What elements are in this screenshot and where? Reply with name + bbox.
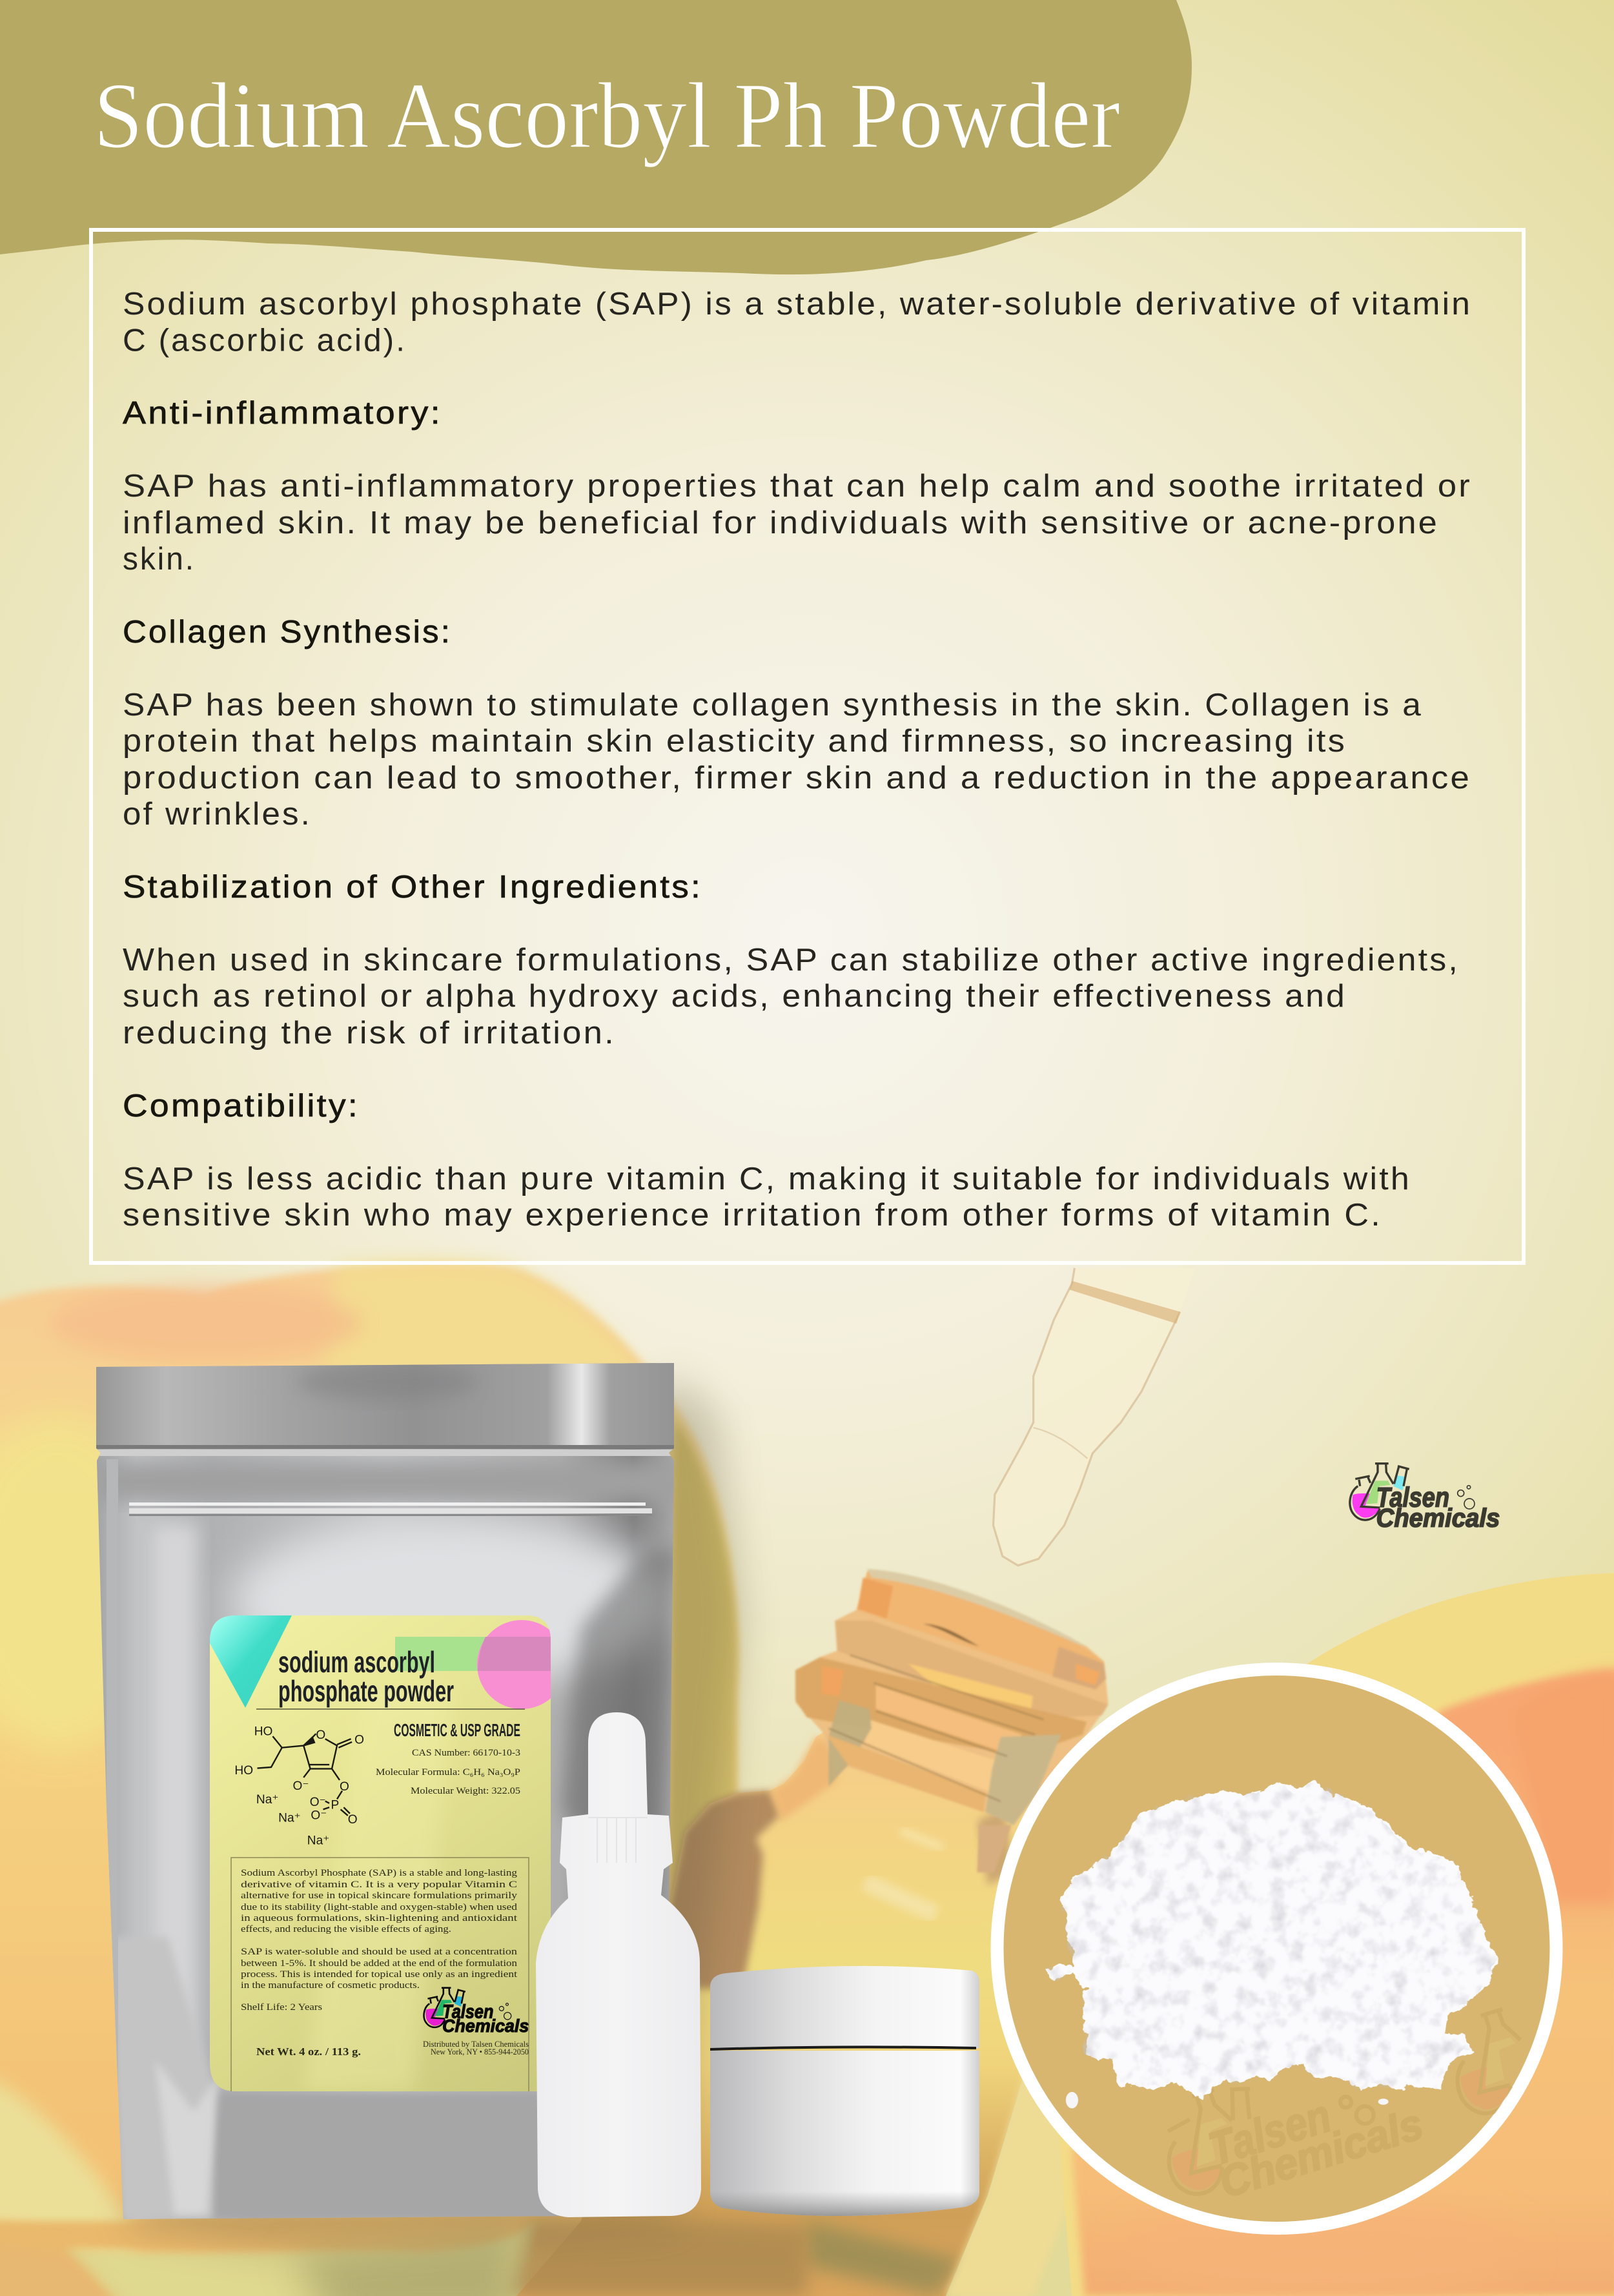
molecule diagram: HO	[234, 1764, 253, 1778]
left citrus fruit	[0, 1260, 737, 2296]
teal triangle	[210, 1615, 292, 1708]
icon: Talsen Chemicals logo: Talsen	[1376, 1482, 1449, 1513]
molecule diagram: P	[331, 1799, 339, 1812]
text block: stabilization: reducing the risk of irritation.	[123, 1016, 616, 1051]
pouch shadow	[123, 1375, 742, 2247]
label description box: in aqueous formulations, skin-lightening and antioxidant	[241, 1913, 518, 1923]
header blob	[0, 0, 1192, 274]
molecule diagram: O⁻	[311, 1809, 327, 1822]
label description box: between 1-5%. It should be added at the end of the formulation	[241, 1958, 518, 1969]
chemical data: Molecular Weight: 322.05	[411, 1786, 520, 1796]
label description box: derivative of vitamin C. It is a very popular Vitamin C	[241, 1880, 517, 1890]
molecule diagram	[234, 1725, 364, 1848]
intro text	[123, 287, 1472, 358]
white powder pile	[1047, 1783, 1499, 2108]
icon: label logo: Talsen	[442, 2001, 493, 2022]
chemical data	[376, 1748, 520, 1796]
text block: anti-inflammatory: inflamed skin. It may be beneficial for individuals with sensitive or acne-prone	[123, 506, 1439, 540]
label title line 2: phosphate powder	[278, 1674, 454, 1708]
white dropper bottle	[536, 1712, 701, 2217]
label description box: effects, and reducing the visible effects of aging.	[241, 1924, 451, 1934]
pink circle	[477, 1620, 551, 1709]
label title: sodium ascorbyl	[278, 1645, 435, 1679]
title: Sodium Ascorbyl Ph Powder	[94, 63, 1120, 168]
text block: anti-inflammatory: SAP has anti-inflammatory properties that can help calm and soothe irritated or	[123, 469, 1472, 504]
text block: collagen synthesis: protein that helps maintain skin elasticity and firmness, so increasing its	[123, 724, 1347, 759]
label description box: process. This is intended for topical use only as an ingredient	[241, 1969, 518, 1980]
text block: collagen synthesis: of wrinkles.	[123, 797, 312, 832]
text block: anti-inflammatory	[123, 469, 1472, 577]
molecule diagram: O	[348, 1813, 358, 1827]
icon: Talsen Chemicals logo	[1350, 1464, 1500, 1532]
white cosmetic jar	[710, 1966, 979, 2216]
icon: Talsen Chemicals logo: Chemicals	[1376, 1504, 1500, 1532]
distributor line 1: Distributed by Talsen Chemicals	[423, 2040, 529, 2049]
molecule diagram: O⁻	[310, 1796, 326, 1809]
label description box: Sodium Ascorbyl Phosphate (SAP) is a stable and long-lasting	[241, 1868, 518, 1878]
watermark logo: Chemicals	[1214, 2100, 1429, 2208]
amber glass bottle body	[510, 1711, 1072, 2296]
green rectangle	[395, 1637, 485, 1671]
molecule diagram: Na⁺	[256, 1793, 278, 1807]
panel: silver foil pouch	[90, 1356, 684, 2228]
molecule diagram: Na⁺	[278, 1811, 301, 1825]
jar base	[710, 2051, 979, 2216]
net weight: Net Wt. 4 oz. / 113 g.	[256, 2045, 361, 2058]
distributor line 2: New York, NY • 855-944-2050	[431, 2047, 529, 2056]
intro text: Sodium ascorbyl phosphate (SAP) is a stable, water-soluble derivative of vitamin	[123, 287, 1472, 322]
text block: stabilization	[123, 943, 1460, 1051]
heading: collagen synthesis: Collagen Synthesis:	[123, 615, 452, 650]
text block: collagen synthesis: SAP has been shown to stimulate collagen synthesis in the skin. Collagen is a	[123, 688, 1423, 723]
watermark logo	[1151, 2007, 1538, 2220]
label description box: SAP is water-soluble and should be used at a concentration	[241, 1947, 518, 1957]
amber bottle neck	[795, 1569, 1108, 1872]
text block: stabilization: such as retinol or alpha hydroxy acids, enhancing their effectiveness and	[123, 979, 1347, 1014]
chemical data: Molecular Formula: C₆H₆ Na₃O₉P	[376, 1767, 520, 1778]
molecule diagram: O	[354, 1733, 364, 1747]
icon: label logo: Chemicals	[442, 2016, 529, 2036]
icon: label logo	[424, 1988, 529, 2036]
watermark logo: Talsen	[1203, 2090, 1337, 2175]
label description box: in the manufacture of cosmetic products.	[241, 1980, 420, 1991]
text block: anti-inflammatory: skin.	[123, 542, 196, 577]
text block: compatibility: sensitive skin who may experience irritation from other forms of vitamin C.	[123, 1198, 1382, 1233]
label description box	[231, 1858, 529, 2091]
molecule diagram: Na⁺	[307, 1834, 329, 1848]
jar lid	[710, 1966, 979, 2048]
heading: anti-inflammatory: Anti-inflammatory:	[123, 396, 442, 431]
molecule diagram: HO	[254, 1725, 272, 1739]
grade heading: COSMETIC & USP GRADE	[394, 1720, 520, 1740]
molecule diagram: O	[316, 1728, 325, 1742]
text block: compatibility	[123, 1162, 1411, 1233]
label description box: due to its stability (light-stable and oxygen-stable) when used	[241, 1902, 518, 1912]
intro text: C (ascorbic acid).	[123, 323, 407, 358]
text block: collagen synthesis: production can lead to smoother, firmer skin and a reduction in the appearance	[123, 761, 1471, 795]
text block: collagen synthesis	[123, 688, 1471, 832]
text block: stabilization: When used in skincare formulations, SAP can stabilize other active ingredients,	[123, 943, 1460, 978]
molecule diagram: O	[340, 1780, 349, 1794]
text block: compatibility: SAP is less acidic than pure vitamin C, making it suitable for individuals with	[123, 1162, 1411, 1196]
product label	[207, 1614, 566, 2095]
label description box: alternative for use in topical skincare formulations primarily	[241, 1891, 518, 1901]
label description box: Shelf Life: 2 Years	[241, 2002, 322, 2013]
molecule diagram: O⁻	[292, 1779, 309, 1793]
glass dropper	[994, 1268, 1196, 1566]
heading: stabilization: Stabilization of Other Ingredients:	[123, 870, 702, 905]
chemical data: CAS Number: 66170-10-3	[412, 1748, 520, 1758]
background photo: citrus and amber bottle	[0, 1260, 1614, 2296]
right citrus fruit	[1059, 1573, 1614, 2296]
heading: compatibility: Compatibility:	[123, 1089, 360, 1123]
panel: description box	[91, 230, 1524, 1263]
panel: powder circle	[997, 1669, 1556, 2228]
